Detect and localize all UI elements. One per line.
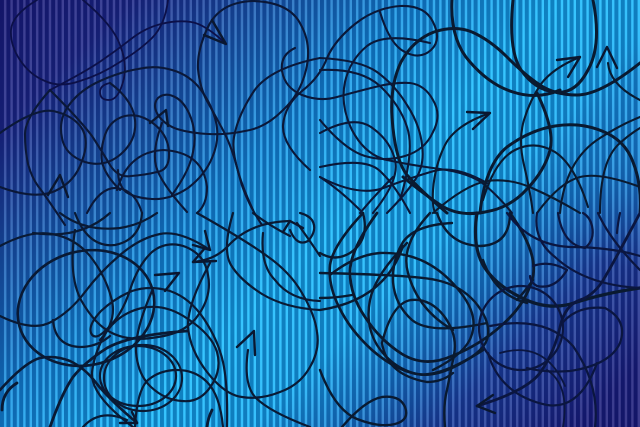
arrowhead: bottom right [477, 395, 495, 413]
navy curves: bottom right [477, 213, 640, 427]
arrowhead: small centre [283, 221, 303, 232]
arrowhead: lower left [155, 273, 179, 291]
arrowhead: upper left [150, 110, 168, 126]
navy curves: top-left [11, 0, 226, 100]
arrowhead: centre pointing right [193, 231, 210, 250]
arrowhead: left [48, 175, 68, 197]
arrowhead: top [204, 20, 226, 44]
arrowhead: bottom centre [237, 331, 255, 355]
thick dark curves: upper right [392, 0, 640, 214]
arrowhead: bottom left [120, 412, 137, 423]
dark curves: lower left [0, 213, 320, 427]
arrowhead: top right [597, 47, 617, 68]
dark curves: thin arcs upper right [433, 57, 640, 213]
arrowhead: centre pointing left [193, 248, 216, 262]
arrowhead: centre right [467, 112, 490, 129]
dark curves: lower right centre [320, 213, 640, 427]
dark curves: left and upper centre [0, 1, 512, 225]
arrowhead: upper right [557, 57, 580, 77]
